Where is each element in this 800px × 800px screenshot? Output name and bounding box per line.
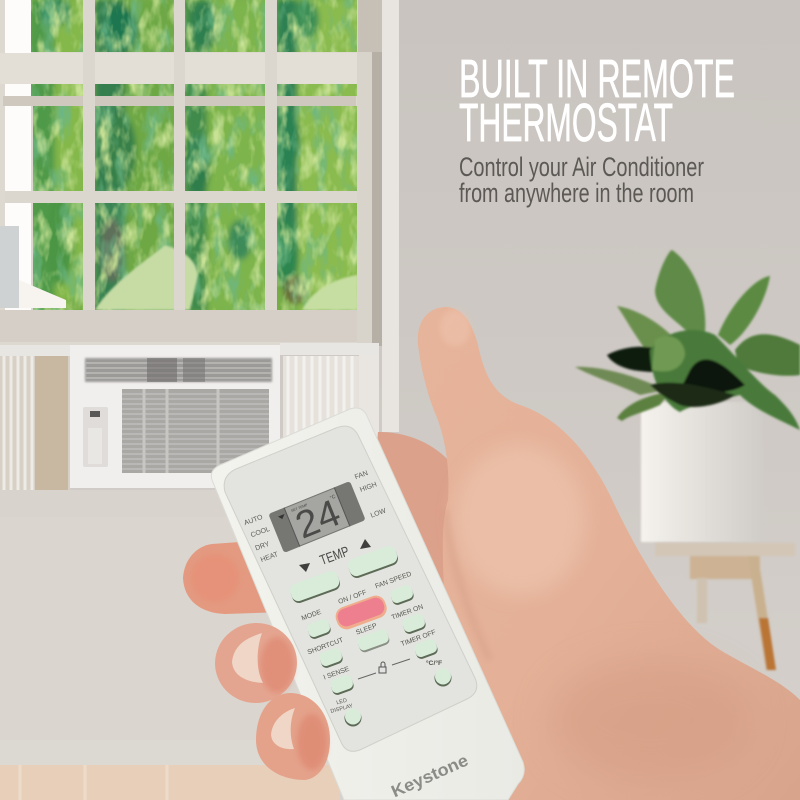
lcd display: °C [329, 494, 337, 501]
floor [0, 765, 340, 800]
timer on button [401, 613, 427, 635]
led display button [344, 708, 362, 726]
plant leaves [575, 250, 800, 430]
keystone logo: Keystone [388, 751, 471, 800]
button labels: I SENSE [323, 666, 351, 681]
plant side table [655, 543, 795, 670]
button labels: TIMER ON [391, 604, 424, 622]
mode and fan labels: AUTO [243, 514, 264, 527]
lock symbol and connecting lines [358, 659, 410, 679]
button labels: TIMER OFF [400, 629, 437, 648]
left accordion side panel [0, 345, 70, 491]
lcd display: SET TEMP [291, 503, 309, 513]
lower left wall [0, 490, 340, 750]
sill below air conditioner [0, 490, 330, 517]
hand back behind remote [360, 432, 475, 640]
mode and fan labels: HIGH [359, 481, 378, 494]
temperature reading: 24 [290, 492, 346, 547]
button labels: °C/°F [426, 659, 442, 667]
remote face panel [224, 426, 477, 751]
temp down button [288, 569, 342, 605]
middle finger [209, 616, 303, 710]
subtitle: from anywhere in the room [459, 178, 694, 208]
palm and thumb [418, 307, 800, 800]
celsius fahrenheit button [434, 668, 452, 686]
button labels: ON / OFF [337, 589, 368, 606]
index finger [183, 540, 285, 614]
mode and fan labels: DRY [254, 541, 271, 552]
mode button [306, 618, 332, 640]
sleep button [356, 628, 391, 654]
trees seen through the window [31, 0, 357, 310]
mode and fan labels: LOW [370, 507, 388, 520]
remote body [211, 408, 524, 800]
temp down arrow [299, 563, 310, 572]
distant white building [0, 226, 19, 308]
ring finger [256, 693, 330, 780]
mode and fan labels: FAN [354, 470, 369, 481]
subtitle [459, 152, 704, 208]
button labels [301, 571, 442, 715]
outdoor light strip [5, 0, 31, 310]
mode and fan labels: COOL [250, 526, 271, 539]
button labels: LED [336, 698, 348, 706]
upper sash rail [0, 53, 372, 84]
air conditioner unit [70, 345, 280, 488]
middle fingernail [232, 633, 263, 683]
window [0, 0, 399, 432]
button labels: DISPLAY [330, 703, 354, 715]
on off button [333, 593, 390, 632]
ring fingernail [271, 708, 295, 749]
baseboard [0, 740, 340, 765]
bottom sill [0, 310, 372, 342]
remote control [211, 408, 524, 800]
lcd display [268, 481, 367, 556]
glazing bars [5, 0, 357, 312]
button labels: MODE [301, 609, 323, 622]
i sense button [329, 674, 355, 696]
plant pot [641, 402, 765, 542]
top vents [85, 358, 272, 382]
main grille [122, 389, 269, 473]
timer off button [413, 638, 439, 660]
subtitle: Control your Air Conditioner [459, 152, 704, 182]
temp up button [346, 544, 400, 580]
right casing [357, 0, 373, 345]
title [459, 49, 735, 153]
button labels: FAN SPEED [374, 571, 413, 590]
thin rail [3, 96, 356, 106]
temp up arrow [360, 539, 371, 549]
shortcut button [318, 647, 344, 669]
control panel [83, 407, 108, 467]
mode and fan labels: HEAT [260, 551, 280, 564]
mode and fan labels [243, 470, 388, 564]
fan speed button [389, 584, 415, 606]
button labels: SHORTCUT [307, 637, 344, 656]
button labels: SLEEP [355, 622, 378, 637]
temp label: TEMP [317, 543, 351, 568]
right accordion side panel [280, 343, 379, 446]
